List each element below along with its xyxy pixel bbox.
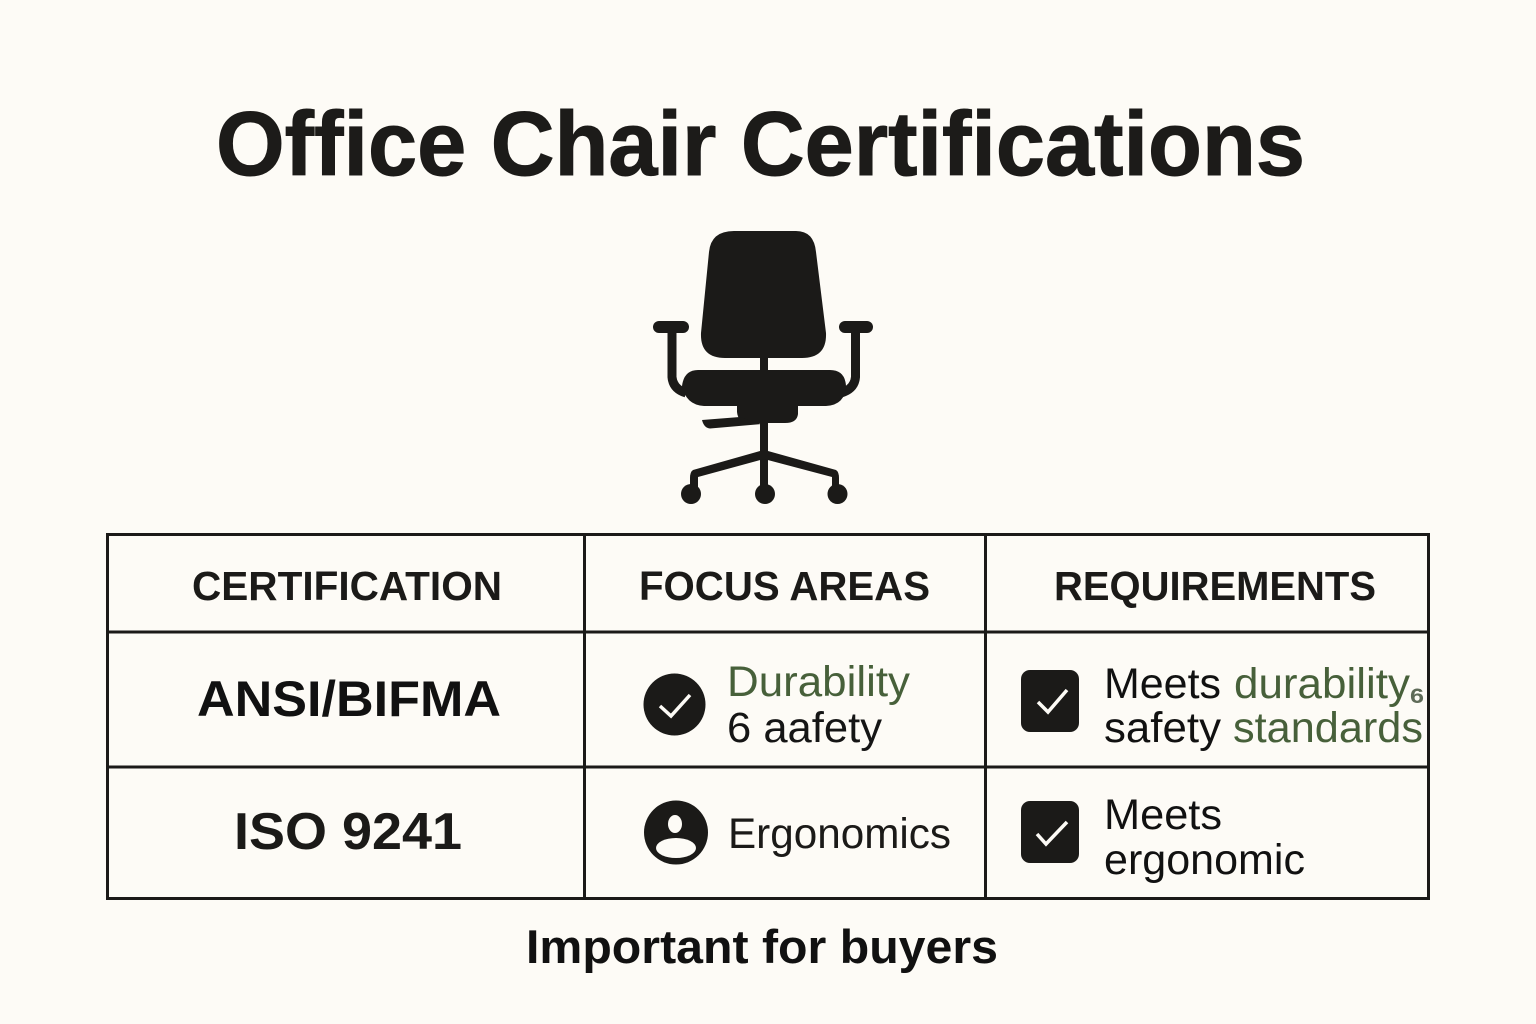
icon: check square one [1021, 670, 1079, 732]
table grid [107, 534, 1428, 899]
icon: person circle [644, 800, 708, 864]
icon: office chair [653, 231, 873, 504]
requirement text: ergonomic: Meets [1104, 791, 1222, 839]
header: focus areas: FOCUS AREAS [639, 563, 930, 609]
caption: Important for buyers [526, 920, 998, 973]
requirement text: ergonomic [1104, 791, 1305, 884]
focus text: durability and safety: Durability [727, 658, 910, 706]
focus text: ergonomics: Ergonomics [728, 810, 951, 858]
requirement text: durability and safety: safety [1104, 704, 1221, 752]
icon: check circle [644, 674, 706, 736]
requirement text: durability and safety: durability [1234, 660, 1411, 708]
icon: check square two [1021, 801, 1079, 863]
requirement text: durability and safety: 6 [1410, 685, 1424, 708]
header: requirements: REQUIREMENTS [1054, 563, 1376, 609]
focus text: durability and safety [727, 658, 910, 752]
row label: ANSI/BIFMA: ANSI/BIFMA [197, 671, 501, 727]
requirement text: ergonomic: ergonomic [1104, 836, 1305, 884]
requirement text: durability and safety [1104, 660, 1424, 752]
row label: ISO 9241: ISO 9241 [234, 803, 462, 861]
requirement text: durability and safety: standards [1233, 704, 1423, 752]
header: certification: CERTIFICATION [192, 563, 502, 609]
requirement text: durability and safety: Meets [1104, 660, 1221, 708]
title: Office Chair Certifications [216, 94, 1305, 195]
focus text: durability and safety: 6 aafety [727, 704, 883, 752]
